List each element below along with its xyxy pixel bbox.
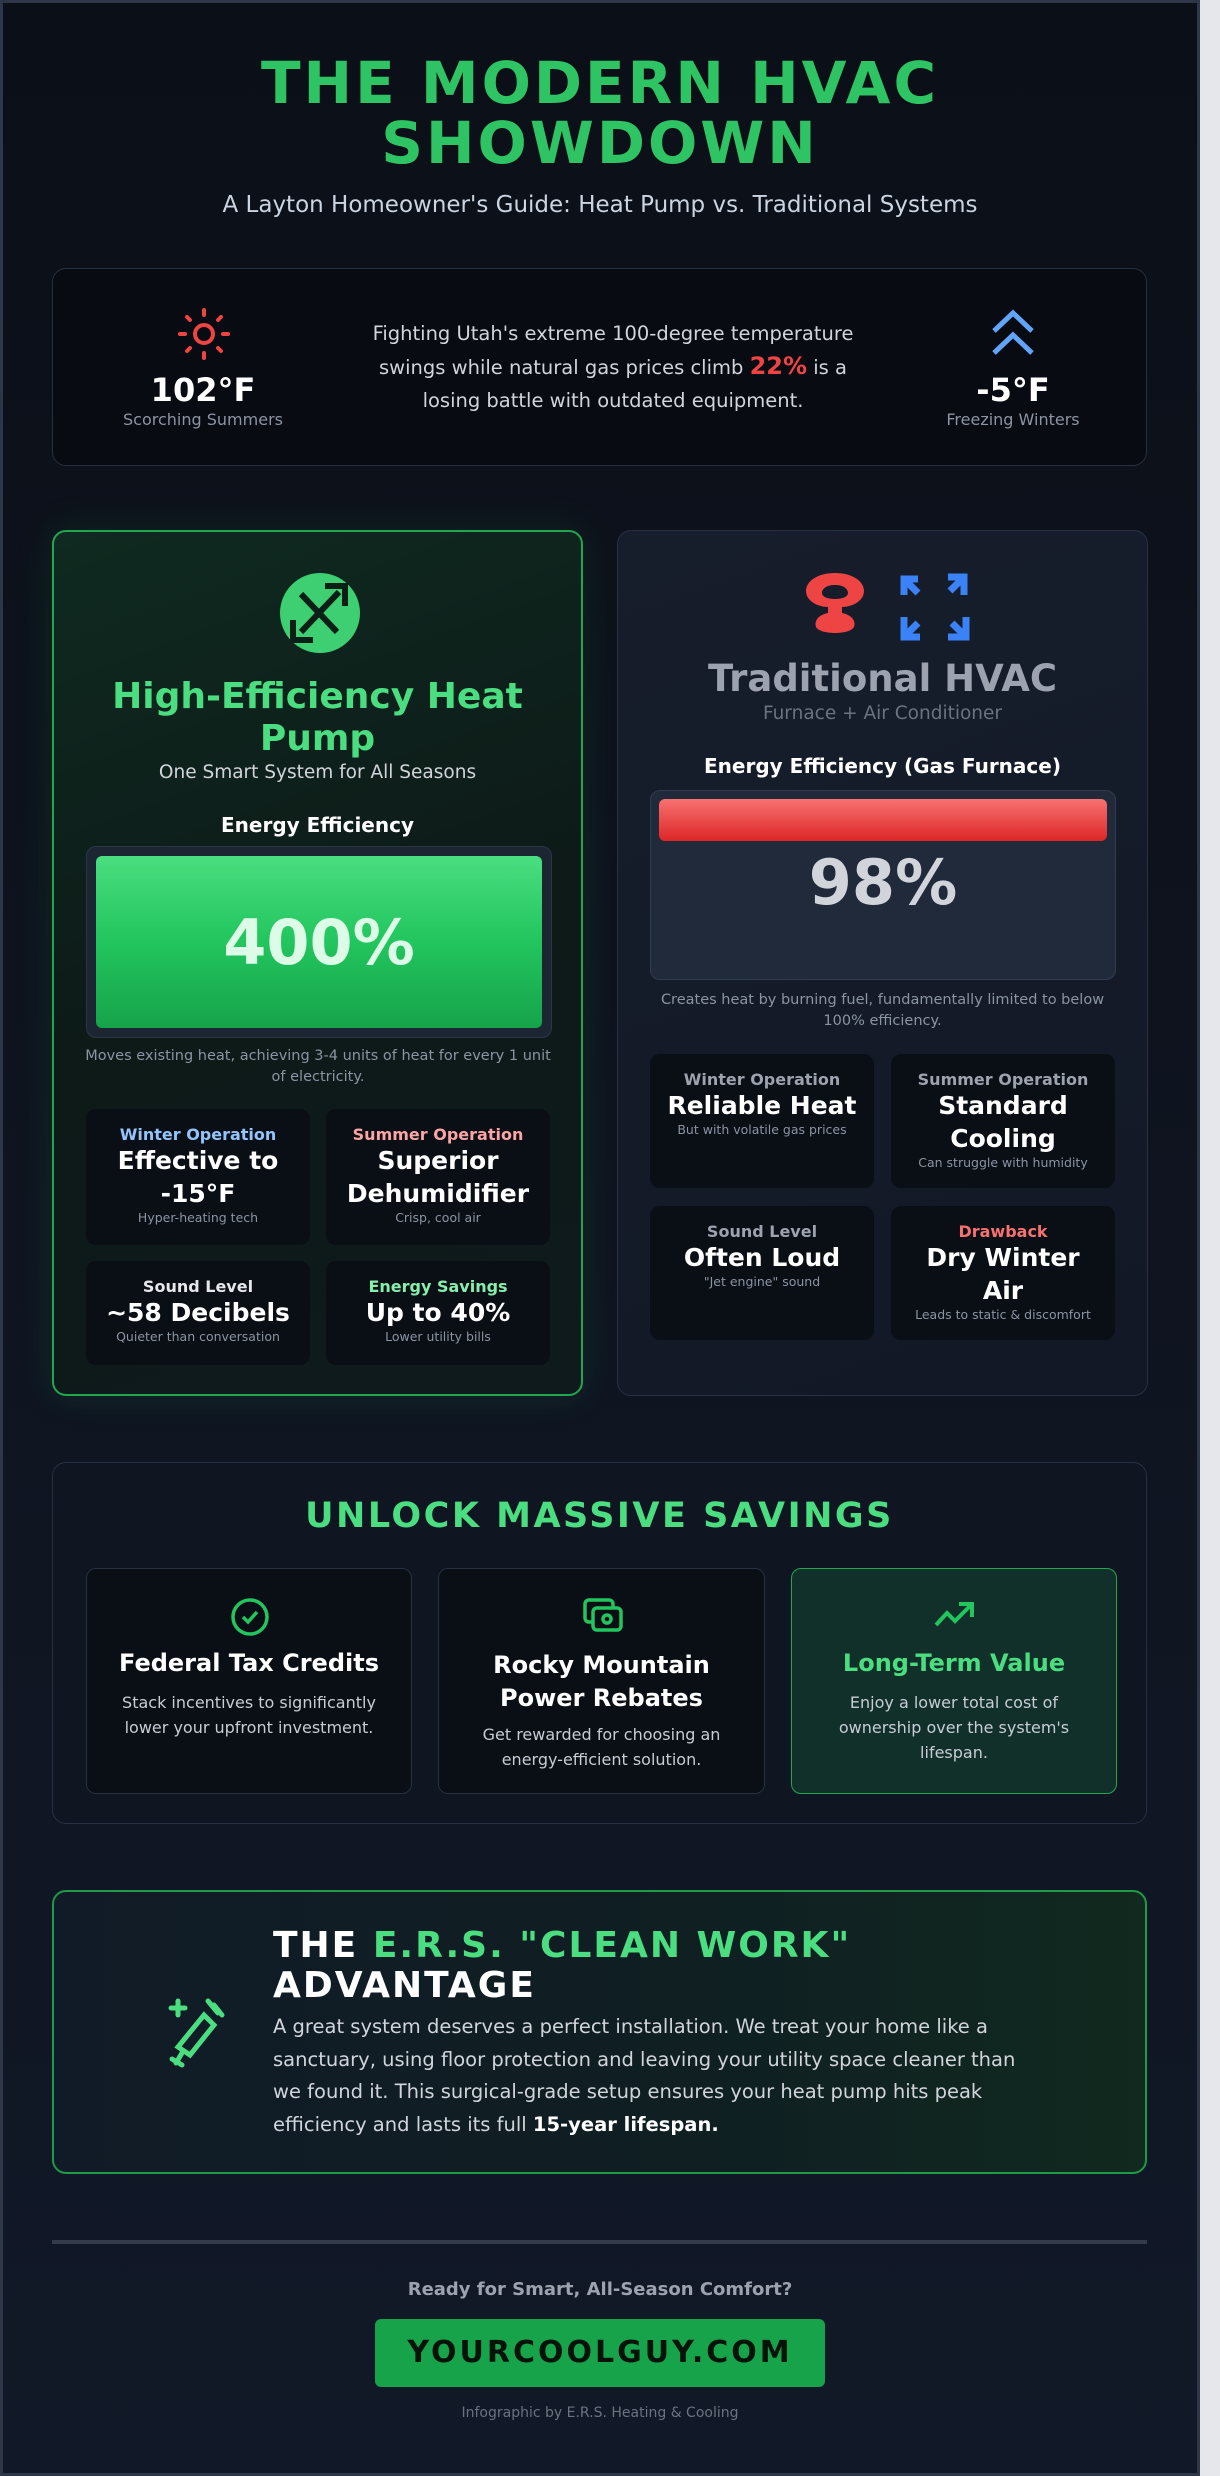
text: gas prices: Fighting Utah's extreme 100-degree temperature swings while natural gas prices climb 22% is a losing battle with outdated equipment. — [373, 322, 853, 412]
heading: UNLOCK MASSIVE SAVINGS — [305, 1496, 894, 1536]
icon: sun — [178, 308, 230, 360]
card: winter: -15°F — [161, 1179, 235, 1208]
card: summer: Summer Operation — [918, 1070, 1088, 1089]
panel: heat pump — [52, 530, 583, 1396]
icon: expand arrows — [900, 574, 970, 640]
stat: 102F: 102°F — [151, 371, 255, 409]
card: sound — [650, 1206, 874, 1340]
card: savings — [326, 1261, 550, 1365]
icon: check — [231, 1598, 269, 1636]
card: summer — [891, 1054, 1115, 1188]
chart: 98% bar: 98% — [809, 846, 957, 919]
icon: chevrons — [992, 310, 1034, 355]
card: sound: Sound Level — [707, 1222, 817, 1241]
card: summer: Summer Operation — [353, 1125, 523, 1144]
panel: savings — [52, 1462, 1147, 1824]
card: winter: Winter Operation — [684, 1070, 840, 1089]
stat: 102F: Scorching Summers — [123, 410, 283, 429]
card: summer: Superior — [377, 1146, 499, 1175]
panel: climate stats — [52, 268, 1147, 466]
card: summer: Cooling — [950, 1124, 1056, 1153]
heading — [112, 676, 523, 759]
heading: Pump — [260, 718, 375, 759]
card: summer: Crisp, cool air — [395, 1210, 481, 1225]
card: sound: Often Loud — [684, 1243, 840, 1272]
heading: ADVANTAGE — [273, 1965, 536, 2006]
card: winter: But with volatile gas prices — [677, 1122, 847, 1137]
stat: -5F: -5°F — [976, 371, 1050, 409]
subheading: Furnace + Air Conditioner — [763, 703, 1002, 724]
description: Creates heat by burning fuel, fundamentally limited to below 100% efficiency. — [661, 992, 1104, 1029]
card: drawback: Leads to static & discomfort — [915, 1307, 1091, 1322]
card: savings: Energy Savings — [368, 1277, 508, 1296]
panel: clean work — [52, 1890, 1147, 2174]
card: drawback — [891, 1206, 1115, 1340]
title — [261, 49, 939, 177]
heading — [273, 1925, 851, 2006]
card: winter: Hyper-heating tech — [138, 1210, 258, 1225]
chart: 400% bar — [86, 846, 552, 1038]
card: sound: Sound Level — [143, 1277, 253, 1296]
text: A great system deserves a perfect installation. We treat your home like a sanctuary, using floor protection and leaving your utility space cleaner than we found it. This surgical-grade setup ensures your heat pump hits peak efficiency and lasts its full 15-year lifespan. — [273, 2015, 1015, 2136]
label: Energy Efficiency (Gas Furnace) — [704, 754, 1061, 778]
card: rebates — [438, 1568, 765, 1794]
icon: money — [583, 1598, 623, 1632]
chart: 400% bar: 400% — [223, 906, 415, 978]
card: drawback: Air — [983, 1276, 1023, 1305]
card: winter: Winter Operation — [120, 1125, 276, 1144]
description: Moves existing heat, achieving 3-4 units of heat for every 1 unit of electricity. — [85, 1048, 551, 1085]
card: winter: Effective to — [118, 1146, 278, 1175]
card: summer: Can struggle with humidity — [918, 1155, 1088, 1170]
card: sound: ~58 Decibels — [106, 1298, 290, 1327]
stat: 102F — [123, 371, 283, 429]
subtitle: A Layton Homeowner's Guide: Heat Pump vs. Traditional Systems — [222, 192, 978, 218]
card: long-term value: Enjoy a lower total cost of ownership over the system's lifespan. — [839, 1693, 1069, 1762]
card: savings: Lower utility bills — [385, 1329, 491, 1344]
heading: THE E.R.S. "CLEAN WORK" — [273, 1925, 851, 1966]
card: summer: Dehumidifier — [347, 1179, 529, 1208]
title: THE MODERN HVAC — [261, 49, 939, 117]
stat: -5F: Freezing Winters — [946, 410, 1080, 429]
icon: syringe — [168, 1998, 224, 2068]
heading: Traditional HVAC — [708, 657, 1057, 700]
card: summer: Standard — [938, 1091, 1068, 1120]
credit: Infographic by E.R.S. Heating & Cooling — [461, 2405, 739, 2421]
icon: flame — [806, 573, 864, 633]
title: SHOWDOWN — [381, 109, 819, 177]
stat: -5F — [946, 371, 1080, 429]
label: Energy Efficiency — [221, 813, 414, 837]
card: drawback: Drawback — [958, 1222, 1048, 1241]
icon: trend — [934, 1602, 974, 1626]
card: long-term value: Long-Term Value — [843, 1649, 1065, 1677]
card: rebates: Power Rebates — [500, 1684, 703, 1712]
footer: call to action: Ready for Smart, All-Season Comfort? — [408, 2279, 792, 2300]
card: rebates: Get rewarded for choosing an energy-efficient solution. — [483, 1725, 720, 1769]
card: long-term value — [791, 1568, 1117, 1794]
card: tax credits — [86, 1568, 412, 1794]
card: winter — [86, 1109, 310, 1245]
card: tax credits: Stack incentives to significantly lower your upfront investment. — [122, 1693, 376, 1737]
card: sound: "Jet engine" sound — [704, 1274, 820, 1289]
panel: traditional — [617, 530, 1148, 1396]
button: YOURCOOLGUY.COM — [407, 2335, 793, 2370]
card: summer — [326, 1109, 550, 1245]
icon: heat pump — [280, 573, 360, 653]
card: rebates: Rocky Mountain — [493, 1651, 710, 1679]
card: winter: Reliable Heat — [667, 1091, 857, 1120]
card: sound: Quieter than conversation — [116, 1329, 280, 1344]
card: savings: Up to 40% — [366, 1298, 510, 1327]
card: drawback: Dry Winter — [926, 1243, 1080, 1272]
card: winter — [650, 1054, 874, 1188]
subheading: One Smart System for All Seasons — [159, 762, 476, 783]
button — [375, 2319, 825, 2387]
card: tax credits: Federal Tax Credits — [119, 1649, 379, 1677]
card: sound — [86, 1261, 310, 1365]
heading: High-Efficiency Heat — [112, 676, 523, 717]
chart: 98% bar — [650, 790, 1116, 980]
